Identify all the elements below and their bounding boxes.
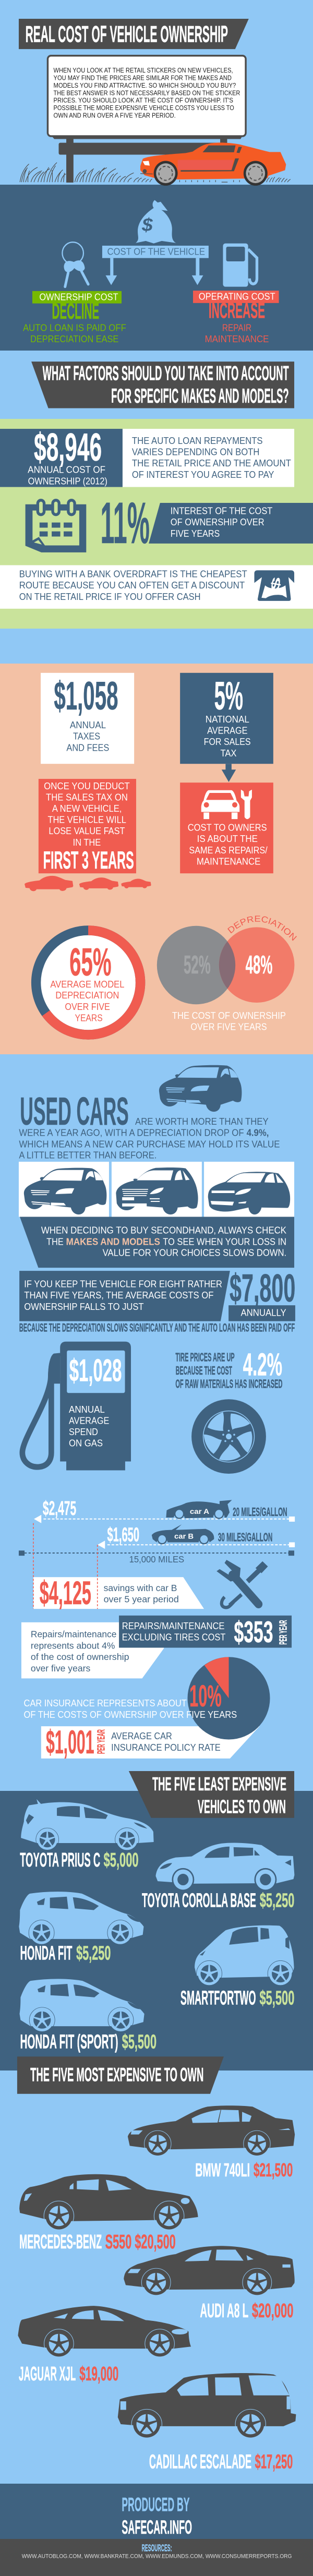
heading banner: what factors	[31, 362, 294, 408]
footer: produced by	[122, 2494, 192, 2538]
panel: auto loan repayments text: VARIES DEPENDING ON BOTH	[132, 446, 259, 458]
panel: bank overdraft	[0, 565, 313, 609]
panel: national average sales tax: FOR SALES	[204, 736, 251, 747]
callout: repairs represents 4 percent	[21, 1622, 164, 1678]
icon: gas pump with annual spend	[22, 1342, 131, 1470]
text: 65 percent average model depreciation: YEARS	[75, 1012, 103, 1024]
chart: car A fuel cost: car A	[190, 1507, 209, 1515]
icon: calendar	[26, 500, 86, 552]
footer: resources: RESOURCES:	[142, 2542, 172, 2553]
text block: used cars intro: ARE WORTH MORE THAN THEY	[135, 1116, 269, 1127]
panel: annual taxes and fees: TAXES	[73, 730, 100, 742]
text: tire prices up 4.2 percent	[175, 1347, 282, 1390]
chart: 15,000 miles axis: 15,000 MILES	[129, 1555, 184, 1564]
text: 65 percent average model depreciation: AVERAGE MODEL	[50, 979, 124, 990]
billboard sign: PRICES. YOU SHOULD LOOK AT THE COST OF OWNERSHIP. IT'S	[54, 96, 233, 104]
section background: least expensive vehicles	[0, 1791, 313, 2071]
text: 52 and 48 percent: 48%	[246, 950, 272, 979]
text: increase reasons	[205, 322, 269, 344]
icon: cash machine	[254, 570, 294, 601]
panel: used car two	[112, 1162, 202, 1217]
text: PRODUCED BY	[122, 2494, 190, 2515]
chart: car A fuel cost	[34, 1497, 295, 1523]
text: decline reasons	[23, 322, 126, 344]
callout: 4,125 savings: over 5 year period	[104, 1594, 179, 1605]
chart: car B fuel cost	[98, 1523, 295, 1549]
chart: 15,000 miles axis	[19, 1550, 294, 1564]
text: increase reasons: REPAIR	[222, 322, 251, 333]
text block: used cars intro: WHICH MEANS A NEW CAR PURCHASE MAY HOLD ITS VALUE	[19, 1138, 280, 1149]
callout: keep the vehicle for eight years: IF YOU KEEP THE VEHICLE FOR EIGHT RATHER	[24, 1278, 222, 1290]
title banner	[19, 19, 249, 49]
text: increase reasons: MAINTENANCE	[205, 333, 269, 344]
section background: factors panel	[0, 419, 313, 629]
car: Toyota Corolla base	[155, 1843, 294, 1891]
callout: 4,125 savings: savings with car B	[104, 1583, 177, 1593]
text: tire prices up 4.2 percent: TIRE PRICES ARE UP	[175, 1351, 235, 1364]
panel: repairs excluding tires: EXCLUDING TIRES COST	[122, 1631, 225, 1643]
arrow: sales tax to cost	[222, 764, 236, 782]
panel: auto loan repayments text: THE RETAIL PRICE AND THE AMOUNT	[132, 458, 291, 468]
text: 65 percent average model depreciation	[50, 940, 124, 1024]
red dotted guide lines	[33, 1523, 98, 1609]
stat: 11 percent interest: 11%	[100, 491, 150, 556]
label: depreciation arc: DEPRECIATION	[227, 916, 297, 941]
callout: repairs represents 4 percent: represents about 4%	[31, 1640, 115, 1651]
text: Jaguar price: $19,000	[79, 2363, 118, 2385]
billboard sign: OWN AND RUN OVER A FIVE YEAR PERIOD.	[54, 111, 176, 119]
panel: repairs excluding tires	[119, 1615, 292, 1648]
text: car insurance 10 percent	[24, 1679, 237, 1720]
text: cost of ownership over five years: OVER FIVE YEARS	[190, 1021, 267, 1032]
text: Honda Fit Sport price: HONDA FIT (SPORT)	[20, 2030, 118, 2053]
icon: gas pump with annual spend: SPEND	[69, 1426, 98, 1437]
arrow: to ownership cost	[105, 258, 117, 285]
panel: used car one	[19, 1162, 109, 1217]
panel: first 3 years: LOSE VALUE FAST	[49, 825, 125, 836]
icon: three shrinking cars	[25, 876, 151, 891]
icon: fuel pump	[223, 244, 257, 287]
billboard sign: POSSIBLE THE MORE EXPENSIVE VEHICLE COSTS YOU LESS TO	[54, 104, 234, 112]
chart: car A fuel cost: $2,475	[43, 1497, 76, 1519]
panel: bank overdraft: BUYING WITH A BANK OVERDRAFT IS THE CHEAPEST	[19, 568, 247, 580]
car: Jaguar XJL	[18, 2306, 191, 2358]
panel: annual taxes and fees: ANNUAL	[70, 719, 106, 730]
text: 65 percent average model depreciation: DEPRECIATION	[55, 990, 119, 1001]
stat: 11 percent interest	[100, 491, 313, 556]
billboard sign	[47, 56, 246, 183]
callout: check makes and models: THE	[46, 1236, 64, 1247]
panel: bank overdraft: ROUTE BECAUSE YOU CAN OFTEN GET A DISCOUNT	[19, 580, 245, 591]
text: Honda Fit price: $5,250	[76, 1942, 111, 1964]
text: car insurance 10 percent: OF THE COSTS OF OWNERSHIP OVER FIVE YEARS	[24, 1709, 237, 1720]
panel: repairs excluding tires: REPAIRS/MAINTENANCE	[122, 1620, 224, 1631]
panel: first 3 years: IN THE	[73, 837, 101, 848]
panel: first 3 years	[39, 779, 136, 874]
car: Audi A8 L	[124, 2246, 295, 2296]
stat: 11 percent interest: OF OWNERSHIP OVER	[171, 516, 264, 527]
icon: gas pump with annual spend: ANNUAL	[69, 1403, 105, 1415]
panel: first 3 years: ONCE YOU DEDUCT	[44, 780, 130, 791]
callout: check makes and models	[20, 1217, 294, 1268]
callout: repairs represents 4 percent: of the cost of ownership	[31, 1652, 129, 1662]
billboard sign: YOU MAY FIND THE PRICES ARE SIMILAR FOR THE MAKES AND	[54, 74, 232, 81]
panel: repairs excluding tires: PER YEAR	[278, 1620, 289, 1645]
heading banner: five least expensive	[129, 1771, 294, 1818]
chart: insurance pie	[187, 1657, 270, 1739]
callout: average car insurance	[41, 1724, 259, 1761]
section background: resources	[0, 2539, 313, 2576]
panel: annual taxes and fees	[41, 673, 134, 764]
callout: average car insurance: INSURANCE POLICY RATE	[111, 1742, 221, 1753]
panel: annual cost of ownership: $8,946	[34, 425, 102, 469]
panel: cost to owners: COST TO OWNERS	[188, 822, 267, 833]
billboard sign: MODELS YOU FIND ATTRACTIVE. SO WHICH SHOULD YOU BUY?	[54, 81, 236, 89]
panel: cost to owners: IS ABOUT THE	[197, 833, 258, 844]
callout: repairs represents 4 percent: over five years	[31, 1663, 91, 1674]
callout: average car insurance: AVERAGE CAR	[111, 1730, 172, 1741]
text block: used cars intro	[19, 1089, 280, 1161]
text: Toyota Prius C price: $5,000	[104, 1848, 139, 1871]
text: BMW price: BMW 740LI	[195, 2159, 250, 2181]
text: decline reasons: AUTO LOAN IS PAID OFF	[23, 322, 126, 333]
stat: 7,800 annually	[228, 1266, 295, 1321]
icon: gas pump with annual spend: AVERAGE	[69, 1415, 109, 1426]
callout: average car insurance: PER YEAR	[95, 1729, 107, 1754]
text: 52 and 48 percent: 52%	[184, 950, 211, 979]
icon: gas pump with annual spend: ON GAS	[69, 1437, 103, 1449]
footer: resources	[22, 2542, 292, 2559]
heading banner: five most expensive	[17, 2056, 224, 2094]
text: Toyota Prius C price: TOYOTA PRIUS C	[20, 1848, 100, 1871]
panel: first 3 years: THE VEHICLE WILL	[47, 814, 126, 825]
callout: operating cost	[193, 291, 279, 323]
icon: roadside grass	[20, 163, 291, 182]
panel: auto loan repayments text: THE AUTO LOAN REPAYMENTS	[132, 435, 263, 446]
chart: cost of ownership venn	[157, 926, 294, 1004]
callout: check makes and models: MAKES AND MODELS	[66, 1236, 160, 1247]
chart: car B fuel cost: car B	[174, 1532, 194, 1540]
callout: check makes and models: VALUE FOR YOUR CHOICES SLOWS DOWN.	[103, 1247, 286, 1258]
callout: keep the vehicle for eight years: THAN FIVE YEARS, THE AVERAGE COSTS OF	[24, 1290, 213, 1301]
stat: 11 percent interest: INTEREST OF THE COST	[171, 505, 272, 516]
text: car insurance 10 percent: 10%	[189, 1679, 222, 1713]
text block: used cars intro: 4.9%,	[247, 1127, 269, 1138]
section background: taxes and depreciation	[0, 664, 313, 1054]
stat: 7,800 annually: ANNUALLY	[240, 1307, 286, 1318]
car: Toyota Prius C	[21, 1799, 154, 1851]
panel: national average sales tax: TAX	[220, 748, 236, 759]
billboard sign: THE BEST ANSWER IS NOT NECESSARILY BASED ON THE STICKER	[54, 89, 240, 97]
text: cost of ownership over five years	[172, 1010, 286, 1032]
icon: gas pump with annual spend: $1,028	[69, 1352, 122, 1388]
panel: national average sales tax: 5%	[214, 673, 243, 718]
callout: check makes and models: WHEN DECIDING TO BUY SECONDHAND, ALWAYS CHECK	[41, 1224, 286, 1236]
text: Audi price: AUDI A8 L	[200, 2300, 248, 2322]
panel: first 3 years: FIRST 3 YEARS	[43, 846, 134, 874]
icon: tire and wheel	[191, 1399, 266, 1474]
text: cost of ownership over five years: THE COST OF OWNERSHIP	[172, 1010, 286, 1021]
panel: annual cost of ownership: ANNUAL COST OF	[28, 464, 105, 475]
text: Mercedes price: MERCEDES-BENZ	[19, 2230, 102, 2253]
car: BMW 740Li	[128, 2105, 295, 2157]
panel: national average sales tax: NATIONAL	[206, 714, 249, 725]
car: Mercedes-Benz S550	[19, 2174, 198, 2231]
text: 52 and 48 percent	[184, 950, 272, 979]
panel: auto loan repayments text: OF INTEREST YOU AGREE TO PAY	[132, 469, 274, 480]
car: Cadillac Escalade	[118, 2373, 296, 2439]
callout: keep the vehicle for eight years: OWNERSHIP FALLS TO JUST	[24, 1301, 144, 1312]
callout: ownership cost: DECLINE	[52, 298, 99, 323]
icon: car keys	[62, 242, 88, 287]
text: tire prices up 4.2 percent: BECAUSE THE COST	[176, 1364, 232, 1377]
label: cost of the vehicle: COST OF THE VEHICLE	[107, 246, 205, 257]
panel: first 3 years: A NEW VEHICLE,	[52, 803, 122, 814]
callout: keep the vehicle for eight years	[19, 1271, 230, 1321]
panel: used car three	[204, 1162, 294, 1217]
section background: produced by	[0, 2484, 313, 2539]
icon: used car above heading	[159, 1065, 242, 1112]
callout: repairs represents 4 percent: Repairs/maintenance	[31, 1629, 116, 1640]
icon: wrench and screwdriver	[216, 1560, 268, 1607]
icon: money bag	[136, 200, 176, 244]
section background: cost of the vehicle	[0, 185, 313, 351]
panel: national average sales tax	[180, 673, 273, 764]
text: Mercedes price: S550 $20,500	[105, 2230, 176, 2253]
stat: 11 percent interest: FIVE YEARS	[171, 528, 220, 539]
icon: cash machine: $	[268, 576, 283, 592]
panel: cost to owners: MAINTENANCE	[197, 856, 260, 867]
panel: annual cost of ownership	[0, 425, 123, 487]
callout: 4,125 savings	[33, 1575, 204, 1611]
text: car insurance 10 percent: CAR INSURANCE REPRESENTS ABOUT	[24, 1698, 187, 1708]
panel: repairs excluding tires: $353	[234, 1615, 273, 1648]
panel: annual cost of ownership: OWNERSHIP (2012)	[28, 475, 107, 486]
callout: check makes and models: TO SEE WHEN YOUR LOSS IN	[163, 1236, 286, 1247]
text: SAFECAR.INFO	[122, 2516, 192, 2538]
text: decline reasons: DEPRECIATION EASE	[30, 333, 118, 344]
car: Honda Fit Sport	[19, 1979, 145, 2033]
panel: cost to owners: SAME AS REPAIRS/	[189, 845, 268, 856]
text block: used cars intro: USED CARS	[20, 1089, 129, 1133]
panel: annual taxes and fees: $1,058	[54, 673, 118, 718]
text block: used cars intro: A LITTLE BETTER THAN BEFORE.	[19, 1149, 156, 1161]
callout: ownership cost: OWNERSHIP COST	[39, 291, 118, 303]
icon: orange sports car	[140, 142, 286, 186]
text: tire prices up 4.2 percent: 4.2%	[243, 1347, 282, 1382]
car: Smart fortwo	[195, 1925, 294, 1987]
callout: ownership cost	[32, 291, 122, 323]
text: 65 percent average model depreciation: OVER FIVE	[65, 1001, 110, 1012]
text block: used cars intro: WERE A YEAR AGO, WITH A DEPRECIATION DROP OF	[19, 1127, 244, 1138]
callout: 4,125 savings: $4,125	[40, 1575, 91, 1611]
panel: national average sales tax: AVERAGE	[207, 725, 247, 736]
panel: auto loan repayments text	[123, 429, 294, 487]
text: Honda Fit price: HONDA FIT	[20, 1942, 73, 1964]
callout: operating cost: OPERATING COST	[199, 291, 275, 302]
callout: average car insurance: $1,001	[46, 1724, 94, 1761]
text: Honda Fit Sport price: $5,500	[122, 2030, 156, 2053]
panel: first 3 years: THE SALES TAX ON	[46, 791, 128, 803]
arrow: to operating cost	[192, 258, 203, 285]
car: Honda Fit	[19, 1892, 144, 1945]
panel: cost to owners	[180, 783, 273, 873]
panel: bank overdraft: ON THE RETAIL PRICE IF YOU OFFER CASH	[19, 591, 201, 602]
text: 65 percent average model depreciation: 65%	[69, 940, 112, 984]
billboard sign: WHEN YOU LOOK AT THE RETAIL STICKERS ON NEW VEHICLES,	[54, 66, 233, 74]
chart: 65 percent donut	[36, 931, 140, 1035]
text: Jaguar price: JAGUAR XJL	[19, 2363, 76, 2385]
chart: car B fuel cost: $1,650	[107, 1523, 139, 1546]
panel: annual taxes and fees: AND FEES	[66, 742, 109, 753]
icon: money bag: $	[141, 214, 153, 235]
